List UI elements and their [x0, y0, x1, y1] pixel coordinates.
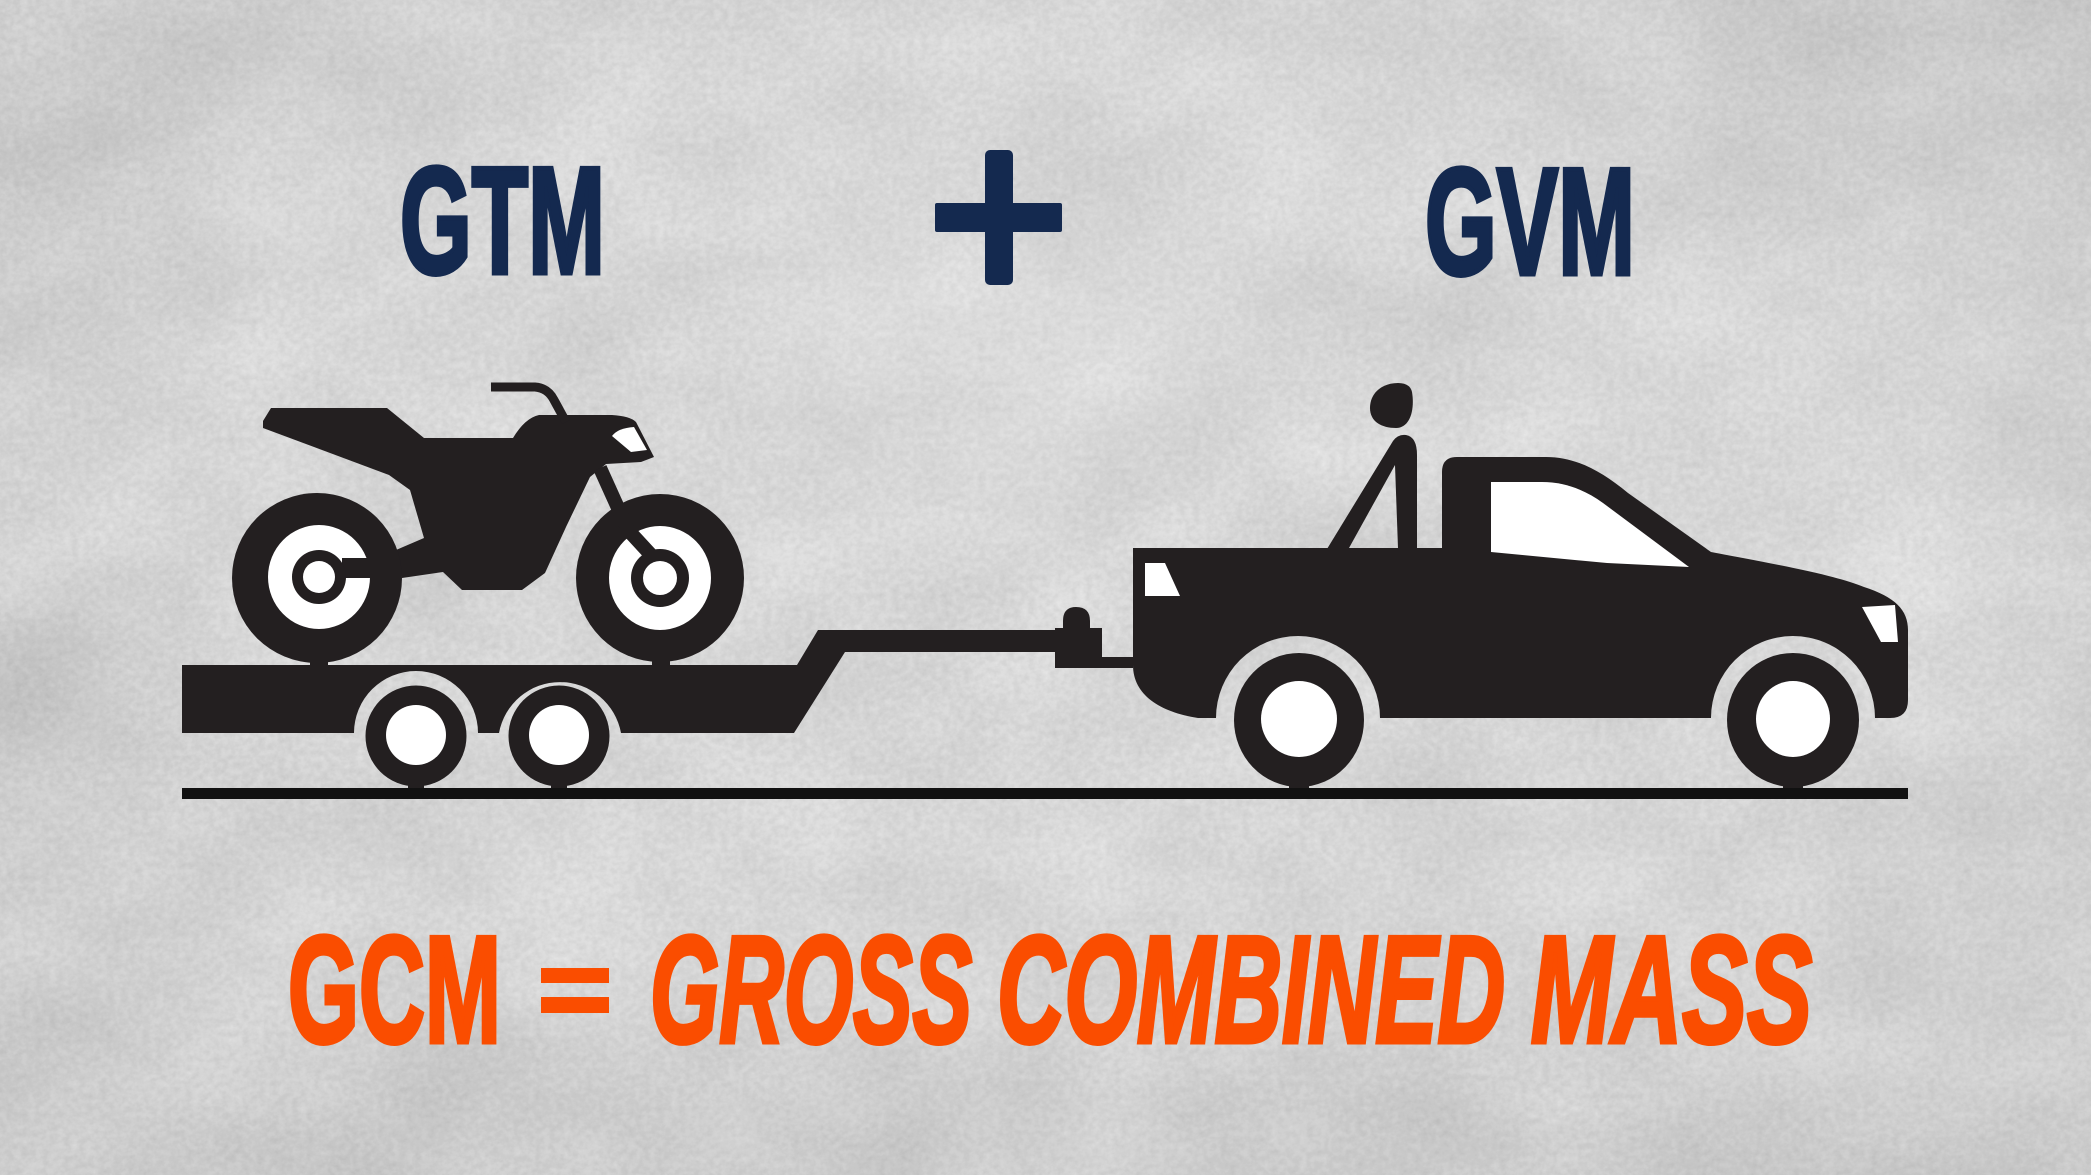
person body	[1327, 435, 1417, 549]
formula: GCM = Gross Combined Mass	[288, 905, 1812, 1075]
trailer wheel 2	[508, 686, 610, 790]
truck window	[1491, 482, 1689, 567]
person head	[1370, 383, 1413, 428]
motorbike front wheel	[576, 494, 744, 668]
trailer wheel 1	[366, 686, 466, 790]
trailer coupling	[1055, 607, 1133, 668]
icon: plus sign	[935, 150, 1062, 285]
heading: GTM: GTM	[400, 136, 605, 306]
heading: GVM: GVM	[1425, 137, 1635, 307]
motorbike body	[263, 408, 654, 590]
label: mass: MASS	[1531, 905, 1812, 1075]
motorbike fork	[600, 468, 652, 556]
illustration: person	[1327, 383, 1417, 549]
ground line	[182, 788, 1908, 799]
label: combined: COMBINED	[997, 905, 1505, 1075]
illustration: motorbike	[232, 387, 744, 668]
label: gross: GROSS	[650, 905, 972, 1075]
motorbike headlight	[612, 427, 647, 452]
motorbike rear wheel	[232, 493, 402, 668]
truck body	[1133, 457, 1908, 718]
illustration: trailer	[182, 607, 1133, 790]
illustration: pickup truck	[1133, 457, 1908, 790]
truck tail light	[1145, 563, 1180, 596]
label: GCM: GCM	[288, 905, 501, 1075]
motorbike handlebar	[491, 387, 566, 422]
equals sign	[541, 968, 609, 1013]
trailer deck and drawbar	[182, 630, 1055, 733]
truck front wheel	[1727, 653, 1859, 790]
truck rear wheel	[1234, 653, 1364, 790]
truck headlight	[1862, 605, 1898, 642]
